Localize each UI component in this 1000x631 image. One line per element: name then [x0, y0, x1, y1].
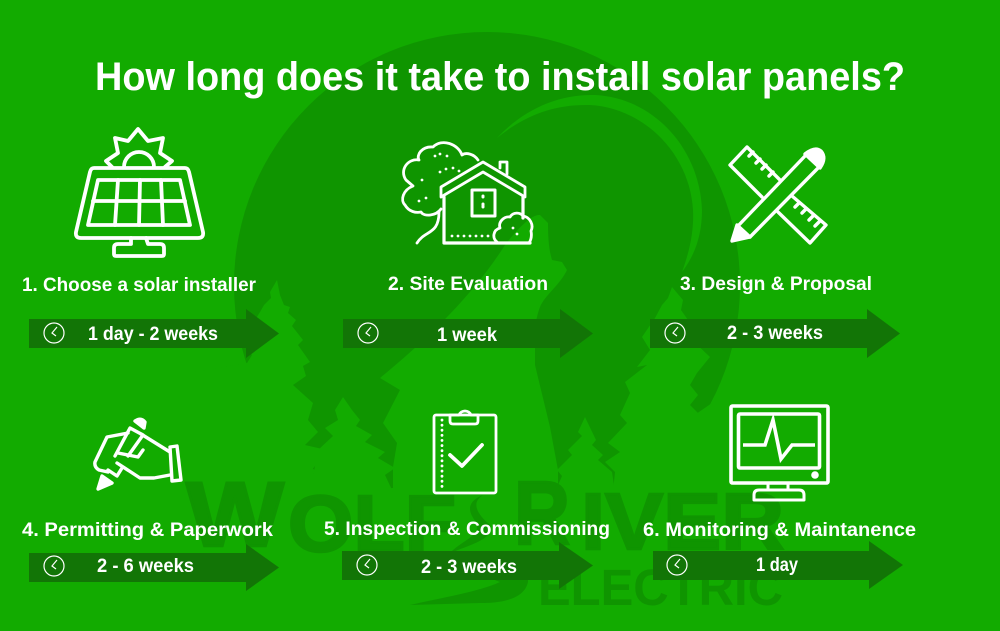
icon: clipboard with check — [434, 411, 496, 493]
watermark wordmark: R — [514, 464, 570, 564]
arrow: duration: 2 - 6 weeks — [97, 556, 194, 577]
icon: house and tree — [403, 143, 532, 243]
arrow: duration: 1 day — [756, 555, 798, 576]
watermark wordmark: IVER — [581, 477, 784, 566]
label: 3. Design & Proposal — [680, 274, 872, 295]
watermark wordmark: OLF — [288, 479, 456, 568]
watermark wordmark: ELECTRIC — [538, 559, 783, 616]
panel: step 5 — [324, 411, 610, 589]
small tree — [555, 417, 615, 492]
large tree — [605, 287, 770, 492]
title: How long does it take to install solar panels? — [95, 55, 905, 99]
watermark logo — [186, 32, 800, 616]
icon: ruler and pencil — [730, 147, 826, 243]
arrow: duration: 1 week — [437, 325, 497, 346]
arrow: duration: 2 - 3 weeks — [421, 557, 517, 578]
crescent — [497, 95, 702, 272]
icon: solar panel — [76, 129, 203, 256]
panel: step 4 — [22, 419, 279, 591]
label: 1. Choose a solar installer — [22, 275, 257, 296]
left tree — [195, 280, 327, 492]
watermark wordmark — [186, 464, 784, 616]
watermark wordmark: W — [186, 464, 284, 566]
arrow: duration — [342, 542, 593, 589]
label: 2. Site Evaluation — [388, 274, 548, 295]
panel: step 6 — [643, 406, 916, 589]
arrow: duration — [653, 541, 903, 589]
moon circle — [234, 32, 740, 538]
arrow: duration: 1 day - 2 weeks — [88, 324, 218, 345]
panel: step 2 — [343, 143, 593, 358]
icon: monitor with pulse — [731, 406, 828, 500]
arrow: duration — [650, 309, 900, 358]
arrow: duration — [29, 544, 279, 591]
panel: step 1 — [22, 129, 279, 358]
centre tree — [310, 397, 395, 492]
wolf silhouette — [380, 215, 567, 492]
arrow: duration — [343, 309, 593, 358]
label: 6. Monitoring & Maintanence — [643, 520, 916, 541]
arrow: duration: 2 - 3 weeks — [727, 323, 823, 344]
lower cut of moon — [200, 488, 800, 548]
label: 4. Permitting & Paperwork — [22, 520, 273, 541]
river swoosh — [410, 495, 528, 605]
panel: step 3 — [650, 147, 900, 358]
arrow: duration — [29, 309, 279, 358]
icon: hand with pen — [95, 419, 181, 489]
label: 5. Inspection & Commissioning — [324, 519, 610, 540]
